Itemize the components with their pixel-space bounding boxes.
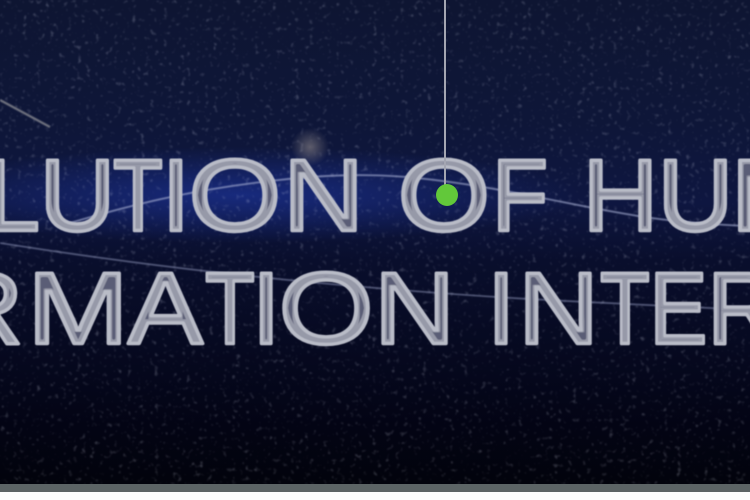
title: line 2: I [252, 252, 280, 366]
icon: green dot [436, 184, 458, 206]
title: line 1: O [188, 139, 281, 253]
title: line 1: U [40, 138, 115, 252]
title: line 2: M [27, 251, 129, 365]
bottom grey edge [0, 484, 750, 492]
title: line 1: O [398, 139, 490, 253]
title: line 2: E [650, 252, 707, 366]
title: line 2 [0, 251, 750, 366]
faint nebula glow [291, 128, 329, 166]
title: line 1: I [162, 138, 190, 252]
milky way blue band [0, 147, 580, 243]
title: line 1: U [658, 138, 733, 252]
title: line 2: O [278, 251, 374, 365]
pointer line [444, 0, 446, 192]
title: line 1: H [582, 138, 658, 252]
orbit lines [0, 175, 750, 310]
title: line 1: T [113, 138, 163, 253]
title: line 1 [0, 138, 750, 253]
title: line 2: N [518, 251, 599, 365]
title: line 1: F [492, 138, 548, 253]
title: line 1: N [283, 138, 364, 252]
title: line 2: A [128, 251, 203, 365]
title: line 2: T [600, 251, 650, 366]
title: line 2: T [205, 251, 255, 366]
title: line 2: I [487, 252, 515, 366]
diagonal streak [0, 100, 50, 127]
title: line 2: N [374, 251, 455, 365]
